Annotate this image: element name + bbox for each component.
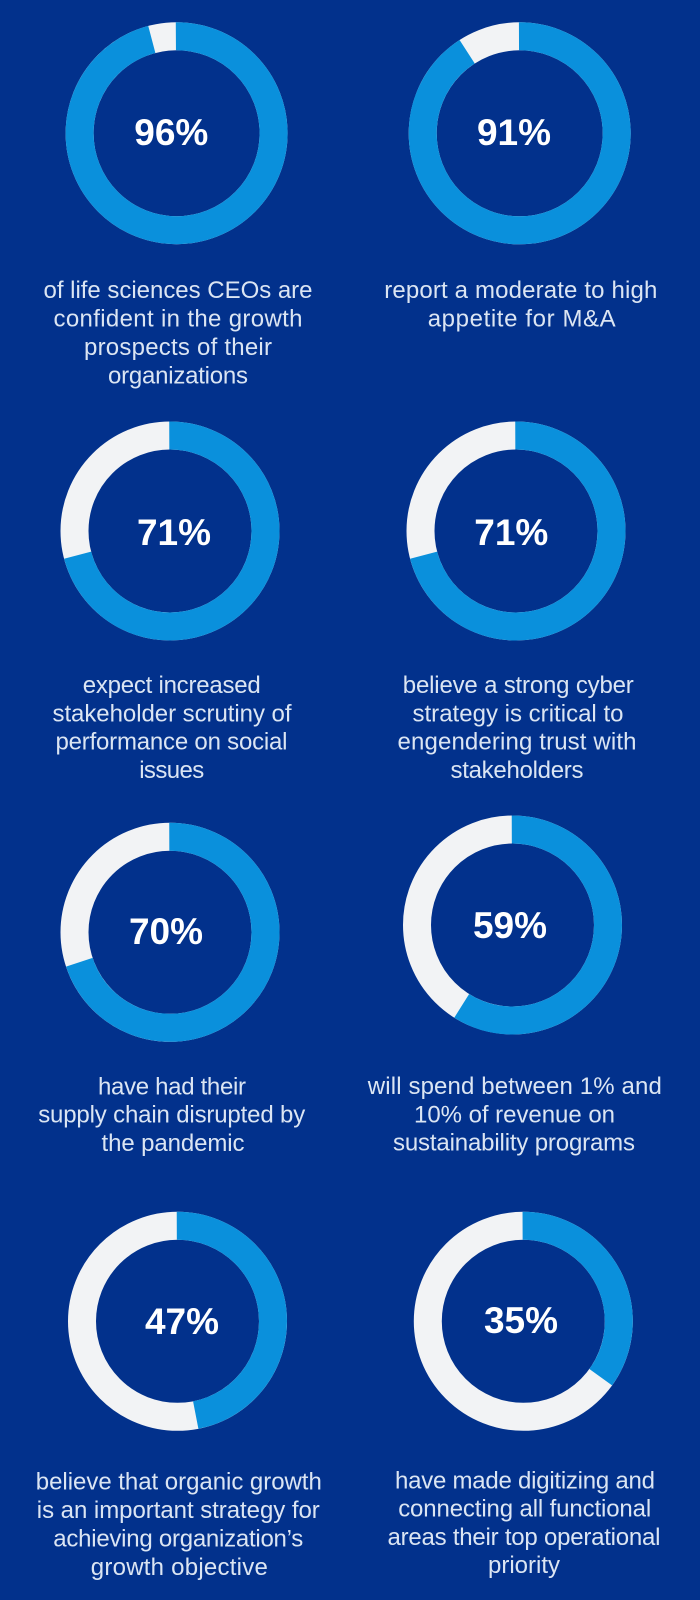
donut chart: 96%: [80, 36, 274, 230]
caption: cyber strategy: engendering trust with: [398, 728, 636, 756]
caption: supply chain: supply chain disrupted by: [38, 1102, 305, 1129]
donut chart: 59%: [417, 830, 608, 1020]
caption: stakeholder scrutiny: stakeholder scrutiny of: [52, 700, 292, 728]
panel: 71% stakeholder scrutiny: [52, 436, 292, 784]
caption: organic growth: [36, 1468, 322, 1581]
caption: stakeholder scrutiny: performance on social: [56, 728, 288, 756]
panel: 91% appetite for M&A: [384, 36, 657, 333]
donut chart: 71%: [74, 436, 266, 626]
caption: cyber strategy: stakeholders: [450, 757, 584, 784]
caption: organic growth: is an important strategy for: [37, 1497, 320, 1524]
caption: digitizing priority: areas their top operational: [388, 1524, 660, 1551]
value: 71%: 71%: [137, 512, 211, 553]
value: 47%: 47%: [145, 1301, 219, 1342]
donut chart: 71%: [420, 436, 612, 626]
donut chart: 70%: [74, 837, 266, 1028]
caption: sustainability spend: 10% of revenue on: [414, 1102, 615, 1129]
donut chart: 47%: [82, 1226, 273, 1417]
caption: digitizing priority: have made digitizing and: [395, 1467, 655, 1494]
caption: stakeholder scrutiny: expect increased: [83, 672, 261, 699]
caption: supply chain: [38, 1073, 305, 1157]
caption: organic growth: achieving organization’s: [53, 1526, 303, 1553]
caption: sustainability spend: will spend between 1% and: [367, 1073, 662, 1100]
panel: 59% sustainability spend: [367, 830, 662, 1157]
caption: stakeholder scrutiny: issues: [139, 757, 204, 784]
caption: M&A appetite: [384, 277, 657, 332]
panel: 47% organic growth: [36, 1226, 322, 1581]
panel: 70% supply chain disruption: [38, 837, 305, 1157]
caption: organic growth: growth objective: [91, 1554, 268, 1581]
caption: growth confidence: organizations: [108, 362, 248, 390]
value: 71%: 71%: [474, 512, 548, 553]
caption: supply chain: the pandemic: [102, 1130, 244, 1157]
caption: sustainability spend: sustainability programs: [393, 1130, 635, 1157]
caption: digitizing priority: connecting all functional: [398, 1496, 651, 1523]
caption: supply chain: have had their: [98, 1073, 246, 1100]
caption: cyber strategy: believe a strong cyber: [403, 672, 634, 699]
caption: growth confidence: of life sciences CEOs are: [44, 277, 312, 304]
donut chart: 91%: [423, 36, 617, 230]
caption: growth confidence: [44, 277, 312, 390]
caption: sustainability spend: [367, 1073, 662, 1157]
caption: digitizing priority: [388, 1467, 660, 1579]
value: 70%: 70%: [129, 911, 203, 952]
value: 35%: 35%: [484, 1300, 558, 1341]
panel: 71% cyber strategy: [398, 436, 636, 784]
caption: M&A appetite: appetite for M&A: [428, 306, 616, 332]
caption: growth confidence: confident in the growth: [54, 306, 302, 332]
panel: 96% confident in growth: [44, 36, 312, 389]
value: 91%: 91%: [477, 112, 551, 153]
donut chart: 35%: [428, 1226, 619, 1417]
value: 96%: 96%: [134, 112, 208, 153]
value: 59%: 59%: [473, 905, 547, 946]
panel: 35% digitizing priority: [388, 1226, 660, 1579]
caption: organic growth: believe that organic growth: [36, 1468, 322, 1495]
caption: cyber strategy: [398, 672, 636, 784]
caption: digitizing priority: priority: [488, 1552, 560, 1579]
caption: growth confidence: prospects of their: [84, 334, 272, 361]
caption: stakeholder scrutiny: [52, 672, 292, 784]
caption: cyber strategy: strategy is critical to: [412, 700, 624, 728]
caption: M&A appetite: report a moderate to high: [384, 277, 657, 304]
